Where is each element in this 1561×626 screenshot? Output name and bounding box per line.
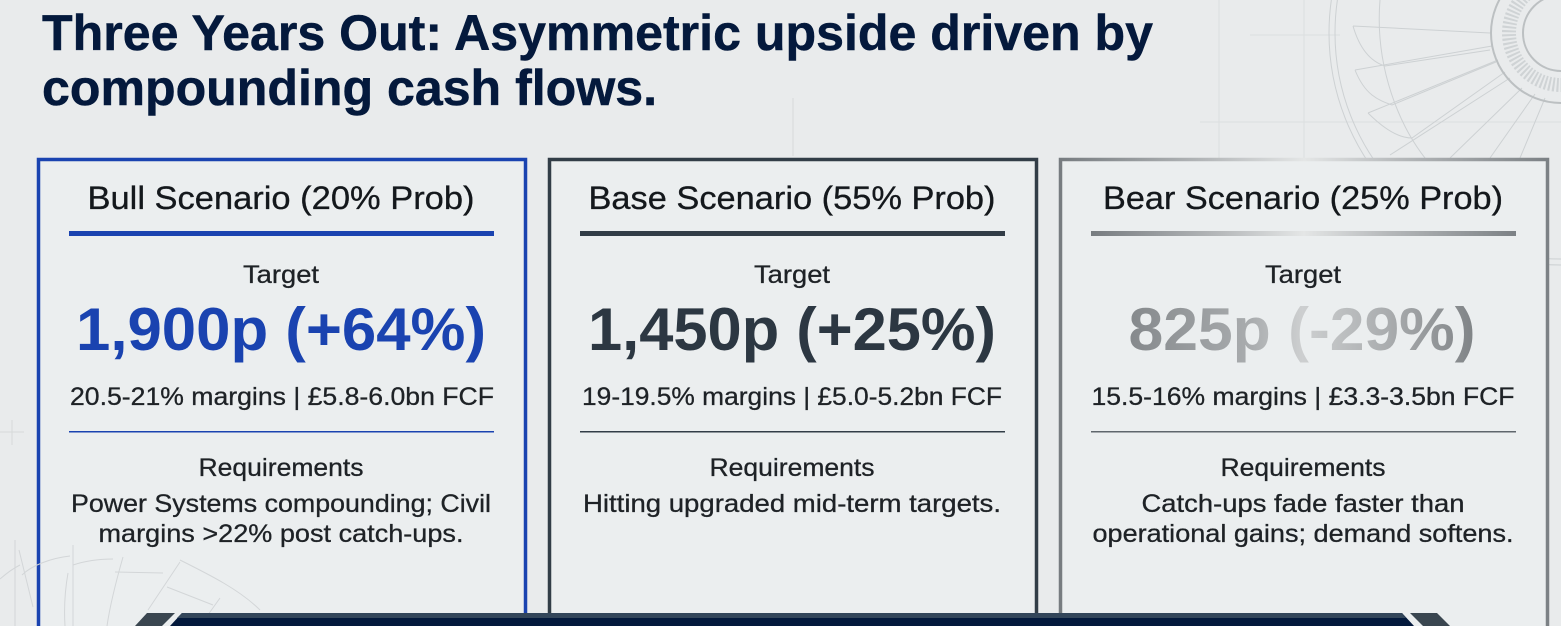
base target value: 1,450p (+25%) — [588, 296, 996, 363]
panel: base scenario: Target — [754, 261, 830, 289]
panel: bull scenario: margins >22% post catch-ups. — [98, 520, 464, 548]
panel: bull scenario: Requirements — [198, 454, 364, 482]
heading: bear: Bear Scenario (25% Prob) — [1103, 180, 1503, 216]
heading: bull: Bull Scenario (20% Prob) — [88, 180, 474, 216]
panel: base scenario: Hitting upgraded mid-term targets. — [583, 490, 1001, 518]
panel: base scenario: 19-19.5% margins | £5.0-5.2bn FCF — [582, 383, 1002, 411]
panel: bull scenario — [38, 160, 526, 626]
panel: base scenario: Requirements — [710, 454, 874, 482]
title: Three Years Out: Asymmetric upside driven by — [42, 5, 1153, 61]
panel: bull scenario: Power Systems compounding; Civil — [71, 490, 491, 518]
panel: base scenario — [550, 160, 1036, 626]
panel: bear scenario — [1060, 160, 1548, 626]
bull target value: 1,900p (+64%) — [76, 296, 486, 363]
panel: bull scenario: Target — [243, 261, 319, 289]
panel: bear scenario: 15.5-16% margins | £3.3-3.5bn FCF — [1092, 383, 1514, 411]
bottom banner — [135, 613, 1450, 626]
title — [42, 5, 1153, 116]
panel: bear scenario: Catch-ups fade faster than — [1142, 490, 1464, 518]
panel: bull scenario: 20.5-21% margins | £5.8-6.0bn FCF — [70, 383, 494, 411]
panel: bear scenario: operational gains; demand softens. — [1092, 520, 1514, 548]
bear target value: 825p (-29%) — [1128, 296, 1476, 363]
blueprint background: turbine bottom left — [0, 540, 260, 626]
heading: base: Base Scenario (55% Prob) — [588, 180, 996, 216]
panel: bear scenario: Target — [1265, 261, 1341, 289]
title: compounding cash flows. — [42, 60, 657, 116]
panel: bear scenario: Requirements — [1220, 454, 1386, 482]
blueprint background: turbine top right — [0, 0, 1561, 445]
